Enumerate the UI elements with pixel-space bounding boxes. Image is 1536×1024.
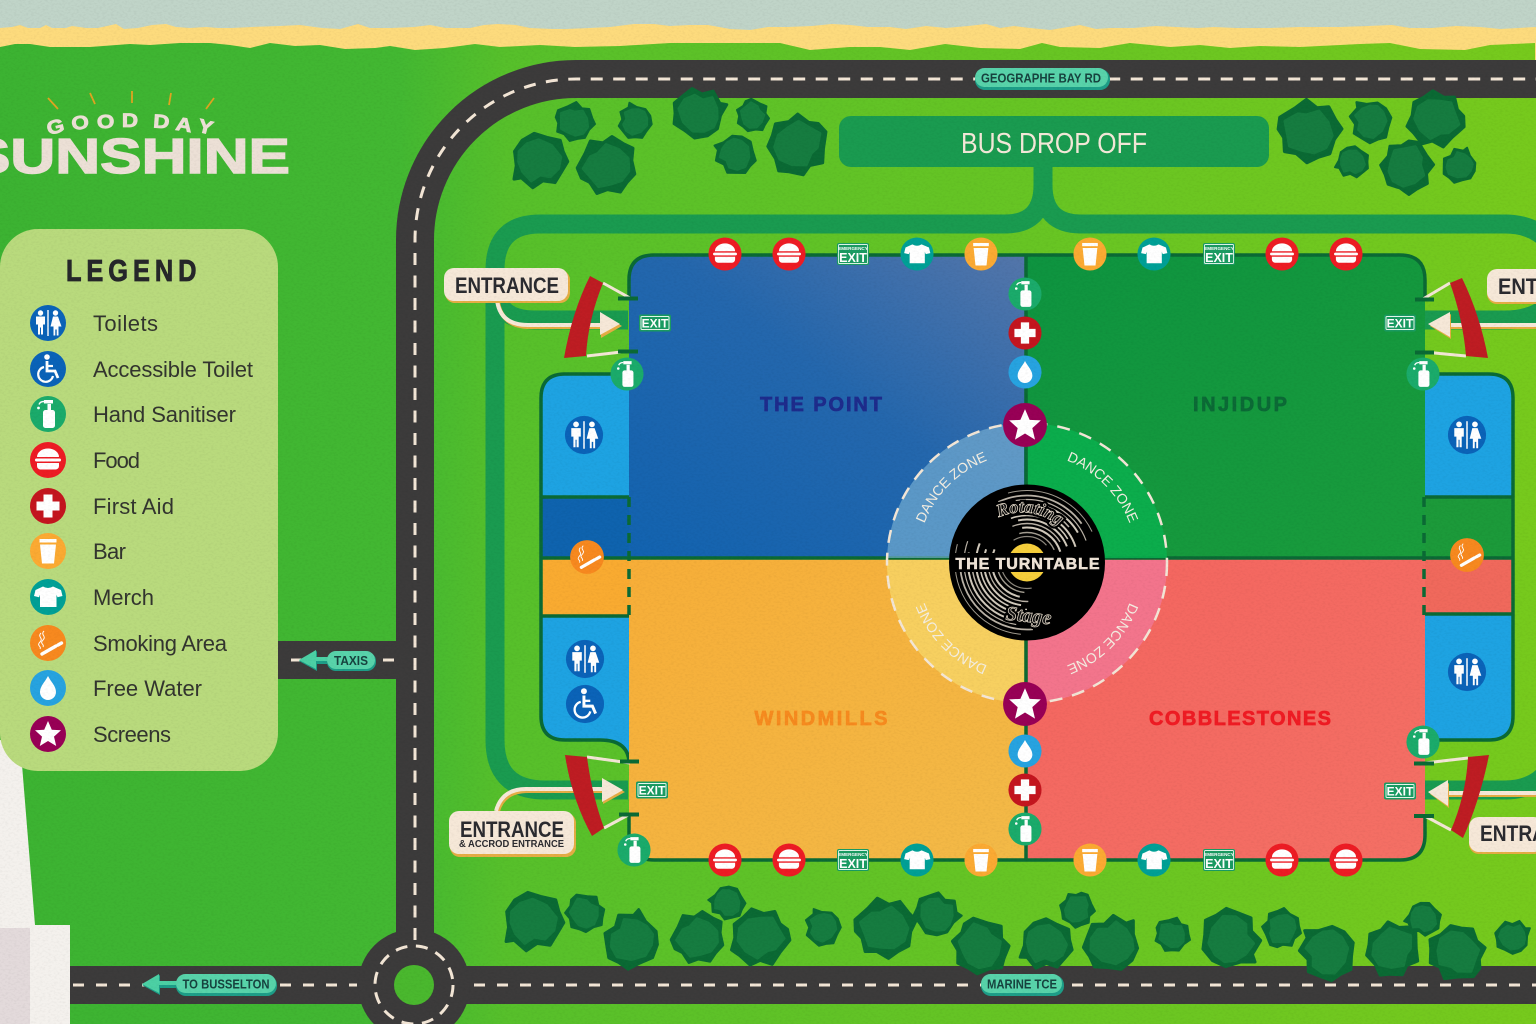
legend: merch: Merch [93, 585, 154, 610]
road sign: Geographe Bay Rd [975, 68, 1110, 90]
trees: bottom row [506, 880, 1531, 992]
legend: smoking area: Smoking Area [93, 631, 228, 656]
exit sign: top right [1384, 314, 1416, 332]
entrance gate: bottom left [449, 755, 639, 857]
panel: legend [0, 229, 278, 771]
quadrant name: The Point: THE POINT [760, 394, 882, 416]
road sign: To Busselton: TO BUSSELTON [182, 978, 270, 992]
dance zone circle: DANCE ZONE [916, 603, 986, 674]
legend: free water: Free Water [93, 676, 202, 701]
legend: first aid [30, 488, 174, 524]
panel: right side amenity zones [1423, 374, 1513, 740]
walking path network [495, 167, 1536, 790]
panel: Injidup quadrant [1026, 255, 1425, 558]
legend: accessible toilet: Accessible Toilet [93, 357, 253, 382]
entrance gate: top left: ENTRANCE [455, 273, 559, 298]
panel: The Point quadrant [629, 255, 1026, 558]
top row amenity icons [708, 237, 1363, 271]
grass shoreline [0, 43, 1535, 70]
exit sign: bottom left [636, 782, 668, 798]
legend: accessible toilet [30, 351, 253, 387]
road sign: taxis: TAXIS [334, 654, 368, 668]
road sign: Geographe Bay Rd: GEOGRAPHE BAY RD [981, 72, 1101, 86]
legend: screens [30, 716, 171, 752]
trees: top left cluster [514, 80, 837, 194]
legend: first aid: First Aid [93, 494, 174, 519]
logo: Good Day Sunshine [0, 91, 290, 184]
the turntable vinyl record: Rotating [998, 500, 1067, 529]
dance zone circle: DANCE ZONE [916, 452, 987, 522]
bottom row amenity icons [708, 843, 1363, 877]
logo: Good Day Sunshine: D [153, 111, 170, 133]
entrance gate: bottom left: ENTRANCE [460, 817, 564, 842]
legend: free water [30, 670, 202, 706]
road sign: taxis [299, 650, 376, 671]
road sign: To Busselton [142, 974, 277, 996]
road sign: Marine Tce [981, 974, 1064, 996]
panel: Cobblestones quadrant [1026, 558, 1425, 860]
logo: Good Day Sunshine: O [96, 111, 115, 133]
legend: hand sanitiser: Hand Sanitiser [93, 402, 236, 427]
the turntable vinyl record: THE TURNTABLE [956, 556, 1100, 573]
quadrant name: Injidup: INJIDUP [1193, 394, 1287, 416]
legend: merch [30, 579, 154, 615]
exit sign: top left [639, 314, 671, 332]
panel: left side amenity zones [541, 374, 631, 764]
entrance gate: top right [1415, 269, 1536, 358]
panel: Windmills quadrant [629, 558, 1026, 860]
exit sign: bottom right [1384, 782, 1416, 800]
logo: Good Day Sunshine: A [174, 113, 194, 137]
legend: screens: Screens [93, 722, 171, 747]
emergency exit: top right [1203, 243, 1235, 265]
quadrant name: Cobblestones: COBBLESTONES [1149, 708, 1331, 730]
emergency exit: bottom right [1203, 849, 1235, 871]
legend: toilets: Toilets [93, 311, 158, 336]
sand strip [0, 24, 1536, 60]
white building, bottom left [0, 740, 70, 1024]
entrance gate: bottom left: & ACCROD ENTRANCE [459, 838, 564, 850]
quadrant name: Windmills: WINDMILLS [754, 708, 888, 730]
the turntable vinyl record: Stage [1005, 603, 1053, 629]
bus drop off [839, 116, 1269, 167]
side zone icons: left [565, 357, 651, 867]
road sign: Marine Tce: MARINE TCE [987, 978, 1057, 992]
trees: top right cluster [1266, 85, 1481, 201]
sea [0, 0, 1536, 40]
logo: Good Day Sunshine: O [70, 111, 90, 135]
logo: Good Day Sunshine: D [122, 111, 138, 132]
legend: food [30, 442, 140, 478]
entrance gate: top left [444, 268, 638, 358]
legend: hand sanitiser [30, 396, 236, 432]
logo: Good Day Sunshine: G [45, 115, 67, 140]
the turntable vinyl record [949, 484, 1105, 640]
emergency exit: bottom left [837, 849, 869, 871]
logo: Good Day Sunshine: Y [196, 115, 215, 139]
legend heading: LEGEND [66, 254, 201, 289]
emergency exit: top left [837, 243, 869, 265]
the turntable vinyl record: Rotating [996, 502, 1064, 526]
legend: toilets [30, 305, 158, 341]
dance zone circle [886, 423, 1168, 702]
legend: food: Food [93, 448, 140, 473]
centre column amenity icons [1003, 277, 1047, 846]
dance zone circle: DANCE ZONE [1067, 604, 1138, 674]
legend: bar [30, 533, 126, 569]
side zone icons: right [1406, 357, 1486, 759]
legend: bar: Bar [93, 539, 126, 564]
bus drop off: BUS DROP OFF [961, 128, 1147, 160]
the turntable vinyl record: Stage [1005, 603, 1053, 629]
legend: smoking area [30, 625, 228, 661]
dance zone circle: DANCE ZONE [1068, 452, 1138, 523]
entrance gate: bottom right [1414, 755, 1536, 854]
